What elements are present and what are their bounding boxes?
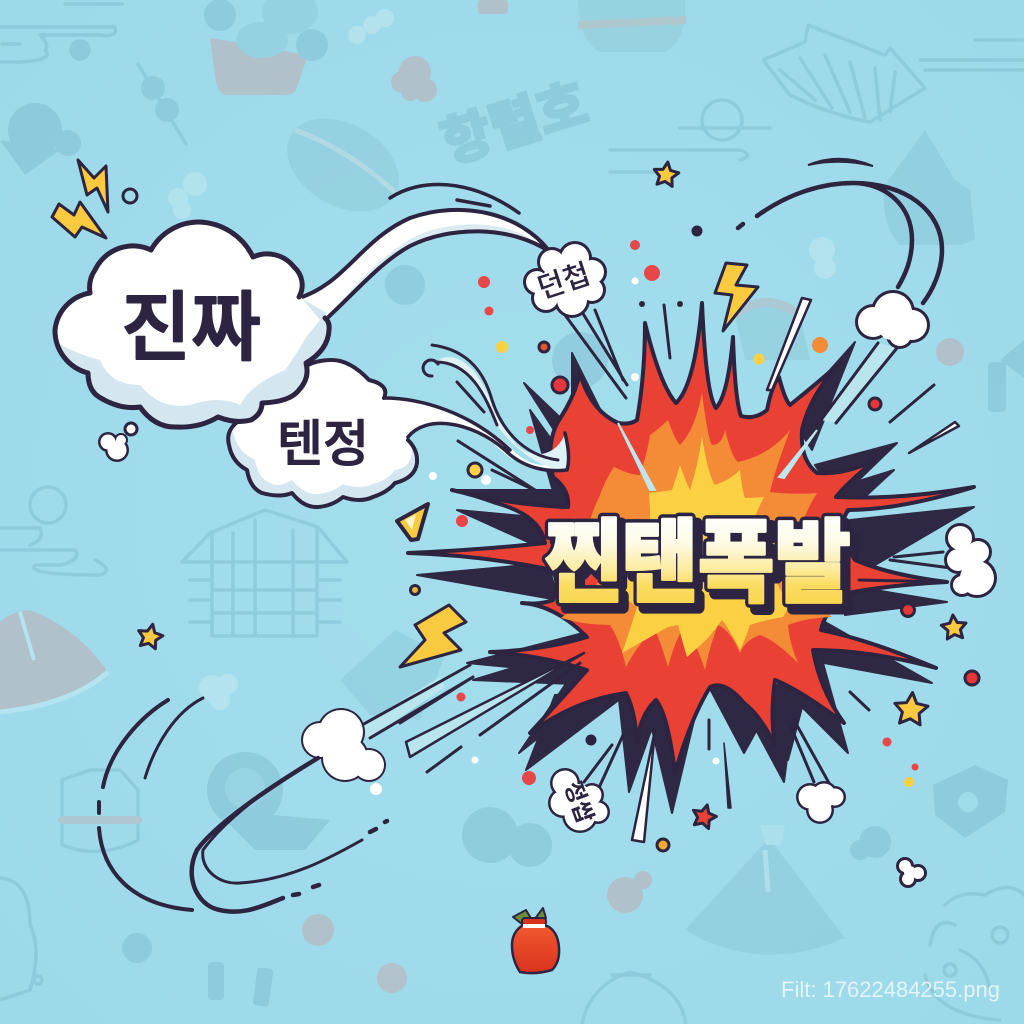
triangle gem xyxy=(397,504,428,540)
swirl lines lower left xyxy=(99,698,387,912)
title shadow: 찐탠폭발 xyxy=(551,519,857,620)
label: 텐정 xyxy=(277,416,369,472)
jar band xyxy=(523,924,545,928)
cloud body xyxy=(228,360,417,507)
star lower right xyxy=(893,691,929,725)
label: 정쌉 xyxy=(560,778,598,826)
small cloud puff below big cloud xyxy=(98,423,137,462)
stars xyxy=(136,160,967,830)
ringed dots xyxy=(410,342,979,851)
slash upper left xyxy=(618,423,655,490)
star left xyxy=(136,622,165,650)
motif: pale flowers xyxy=(168,172,836,710)
dashes xyxy=(293,821,387,895)
fill xyxy=(303,710,384,780)
motif: skewers xyxy=(138,64,186,144)
yellow dots xyxy=(496,341,914,787)
label: 던첩 xyxy=(533,258,594,305)
motif: cloud lines left xyxy=(0,487,106,575)
tail fill xyxy=(296,210,550,338)
swirling lines xyxy=(423,345,558,460)
top lines xyxy=(565,305,670,398)
fill xyxy=(947,526,994,595)
cloud: 진짜 xyxy=(40,222,329,427)
motion arcs over tail xyxy=(390,184,519,213)
gem highlight xyxy=(405,514,416,530)
motif: hanbok left xyxy=(0,610,108,712)
upper right lines xyxy=(821,343,934,423)
motif: red flower xyxy=(391,56,437,102)
outline xyxy=(896,857,927,888)
star right xyxy=(941,614,967,639)
cloud outline xyxy=(55,222,329,427)
cloud: lower xyxy=(796,781,846,824)
inner swoosh xyxy=(203,758,362,883)
fill xyxy=(550,770,608,830)
motif: pale flower xyxy=(348,9,394,44)
motif: hanok roof xyxy=(763,25,925,122)
title: explosion text xyxy=(545,513,857,620)
small ring xyxy=(123,189,137,203)
puff outline xyxy=(98,432,129,462)
fill xyxy=(899,860,924,885)
motif: tree outline bottom right xyxy=(925,888,1024,1020)
tail shade xyxy=(307,224,550,338)
motif: bottles xyxy=(208,962,274,1007)
motif: medallion xyxy=(933,765,1008,838)
cloud body xyxy=(55,222,329,427)
motif: character top right xyxy=(884,130,975,245)
tail fill xyxy=(384,398,568,471)
outer swoosh xyxy=(192,758,318,912)
tail outline xyxy=(279,210,550,336)
jar xyxy=(512,908,559,973)
motif: pot top right xyxy=(578,0,686,52)
motif: house xyxy=(182,510,347,636)
lower white bar xyxy=(632,730,655,842)
dark dots xyxy=(586,301,683,746)
cloud: 정쌉 xyxy=(548,768,610,833)
cloud fill xyxy=(526,244,604,315)
cloud fill xyxy=(858,293,927,346)
motif: swirl cloud xyxy=(610,100,770,172)
bolt two xyxy=(52,202,106,238)
arc over xyxy=(808,159,873,166)
motif: hanbok dress xyxy=(685,825,845,955)
motif: red jar top xyxy=(478,0,508,14)
lower left pale wedge xyxy=(353,677,445,738)
burst orange layer xyxy=(561,393,842,670)
star red xyxy=(690,802,719,830)
lower tapered line xyxy=(724,743,731,808)
red dots xyxy=(456,240,918,785)
tail blend xyxy=(280,296,320,340)
arcs xyxy=(757,183,942,303)
outline xyxy=(944,523,997,598)
cloud outline xyxy=(228,360,417,507)
tail of second cloud xyxy=(384,345,568,471)
cloud highlight xyxy=(58,224,305,406)
lower left lines xyxy=(353,663,580,772)
cloud: 텐정 xyxy=(228,350,417,507)
dash xyxy=(738,224,743,228)
jar body xyxy=(512,925,559,973)
jar leaves xyxy=(513,908,546,924)
lightning pair top left xyxy=(52,160,108,238)
jar lid xyxy=(522,918,546,925)
lower left bar xyxy=(406,653,584,757)
cloud outline xyxy=(855,290,930,349)
small puff lower right xyxy=(896,857,927,888)
motif: tree outline bottom left xyxy=(0,878,42,1000)
motif: character top left xyxy=(0,103,81,175)
cloud: lower left xyxy=(301,708,386,782)
upper right wedge xyxy=(909,422,959,453)
watermark: Filt: 17622484255.png xyxy=(781,977,1000,1002)
white dots xyxy=(370,278,720,795)
title fill: 찐탠폭발 xyxy=(545,513,851,614)
gem body xyxy=(397,504,428,540)
motif: right side items xyxy=(735,302,1024,412)
speed lines xyxy=(353,298,959,842)
cloud: 던첩 xyxy=(523,241,607,318)
motif: blue flowers xyxy=(122,265,891,963)
burst yellow core xyxy=(615,437,790,657)
motif: fan xyxy=(271,99,415,231)
bolt one xyxy=(78,160,108,212)
lightning lower left xyxy=(400,605,466,667)
cloud: upper right xyxy=(692,159,942,349)
cloud: right xyxy=(944,523,997,598)
motif: pot left xyxy=(62,770,138,851)
motif: characters low left xyxy=(207,630,445,850)
tail outline xyxy=(384,398,568,471)
slash upper right xyxy=(779,430,817,478)
orange dot xyxy=(812,337,828,353)
outline xyxy=(548,768,610,833)
cloud highlight xyxy=(231,350,412,494)
dot xyxy=(692,226,702,236)
right lines xyxy=(850,552,951,710)
outline xyxy=(301,708,386,782)
swirl band xyxy=(436,357,568,470)
outline xyxy=(796,781,846,824)
confetti dots xyxy=(370,240,979,851)
tail of big cloud xyxy=(279,210,550,338)
top bar xyxy=(767,298,811,390)
motif: pot bottom xyxy=(582,972,686,1024)
left lines xyxy=(457,382,535,490)
upper right pale wedge xyxy=(821,343,897,423)
left arcs xyxy=(99,700,192,910)
puff fill xyxy=(100,434,126,460)
motif: faded Korean letters: 항렬호 xyxy=(435,74,595,175)
lightning top xyxy=(715,263,758,331)
burst red layer xyxy=(408,303,974,773)
fill xyxy=(798,784,844,822)
motif: cloud right xyxy=(920,40,1024,70)
lower lines xyxy=(584,720,829,792)
title outline: 찐탠폭발 xyxy=(545,513,851,614)
burst dark spikes xyxy=(417,342,974,813)
burst cyan slashes xyxy=(618,423,817,490)
motif: clouds top left xyxy=(0,4,122,62)
motif: red flowers low xyxy=(302,871,652,993)
star top xyxy=(652,160,680,187)
label: 진짜 xyxy=(121,286,261,371)
motif: basket xyxy=(204,0,328,95)
cloud outline xyxy=(523,241,607,318)
ring puff xyxy=(125,423,137,435)
